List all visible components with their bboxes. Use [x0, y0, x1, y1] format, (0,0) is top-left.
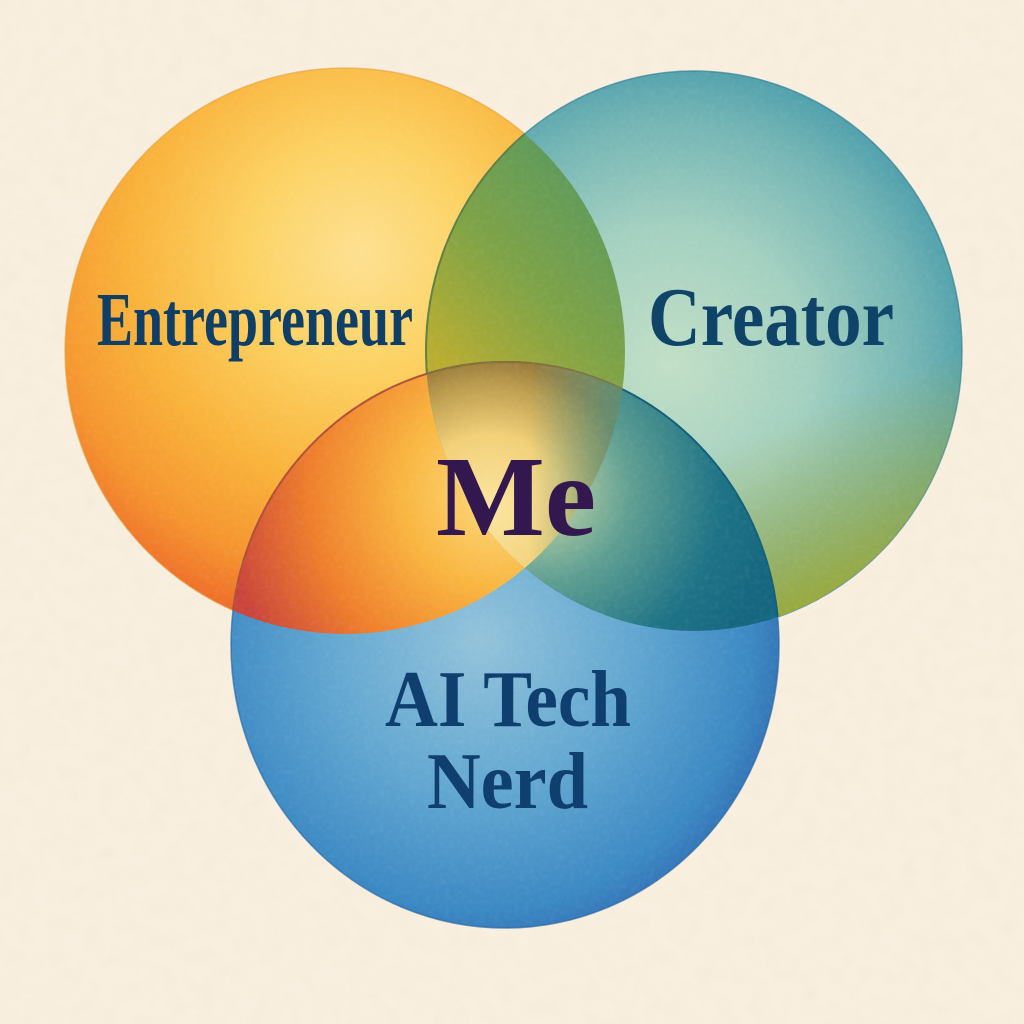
circle: Entrepreneur — [65, 68, 625, 634]
circle: Creator — [426, 71, 962, 631]
overlap: center — [427, 361, 622, 568]
label: Creator: Creator — [648, 271, 894, 364]
overlap: Creator and AI Tech Nerd — [426, 361, 779, 631]
label: Entrepreneur: Entrepreneur — [97, 278, 413, 362]
circle: AI Tech Nerd — [231, 362, 779, 928]
venn diagram infographic — [64, 67, 963, 929]
overlap: Entrepreneur and AI Tech Nerd — [232, 361, 622, 634]
label: AI Tech Nerd: AI Tech — [385, 656, 631, 744]
label: AI Tech Nerd: Nerd — [427, 738, 588, 826]
overlap: Entrepreneur and Creator — [425, 133, 625, 568]
label: AI Tech Nerd — [385, 656, 631, 826]
label: Me: Me — [436, 433, 596, 560]
